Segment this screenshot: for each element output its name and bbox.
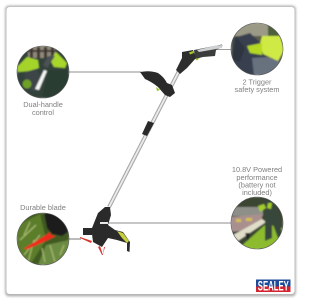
label: powered performance: performance <box>236 173 278 182</box>
label: powered performance: included) <box>242 188 272 197</box>
upper elbow <box>176 50 196 74</box>
label: 2 trigger safety system: 2 Trigger <box>243 78 272 86</box>
connector line: blade <box>69 238 81 240</box>
telescopic collar <box>142 121 154 136</box>
product: grass trimmer <box>80 44 223 255</box>
label: 2 trigger safety system: safety system <box>235 85 279 94</box>
label: powered performance: (battery not <box>238 180 276 190</box>
connector line: dual-handle <box>69 71 141 73</box>
connector line: trigger <box>215 48 231 50</box>
circle outline <box>231 23 283 75</box>
label: powered performance: 10.8V Powered <box>232 165 282 174</box>
label: dual-handle control: control <box>32 108 54 117</box>
connector line: powered <box>108 222 231 224</box>
photo: durable blade <box>17 213 69 265</box>
circle outline <box>17 213 69 265</box>
circle outline <box>231 197 283 249</box>
curved handle <box>140 71 175 97</box>
trigger head <box>194 44 223 59</box>
label: durable blade: Durable blade <box>20 203 66 212</box>
green accent <box>189 51 200 60</box>
label: dual-handle control: Dual-handle <box>23 100 63 109</box>
circle outline <box>17 46 69 98</box>
photo: powered performance <box>231 197 283 249</box>
photo: trigger safety <box>231 23 284 75</box>
cutter head <box>80 207 130 255</box>
photo: dual-handle control <box>17 46 69 98</box>
trimmer pole <box>109 71 179 207</box>
